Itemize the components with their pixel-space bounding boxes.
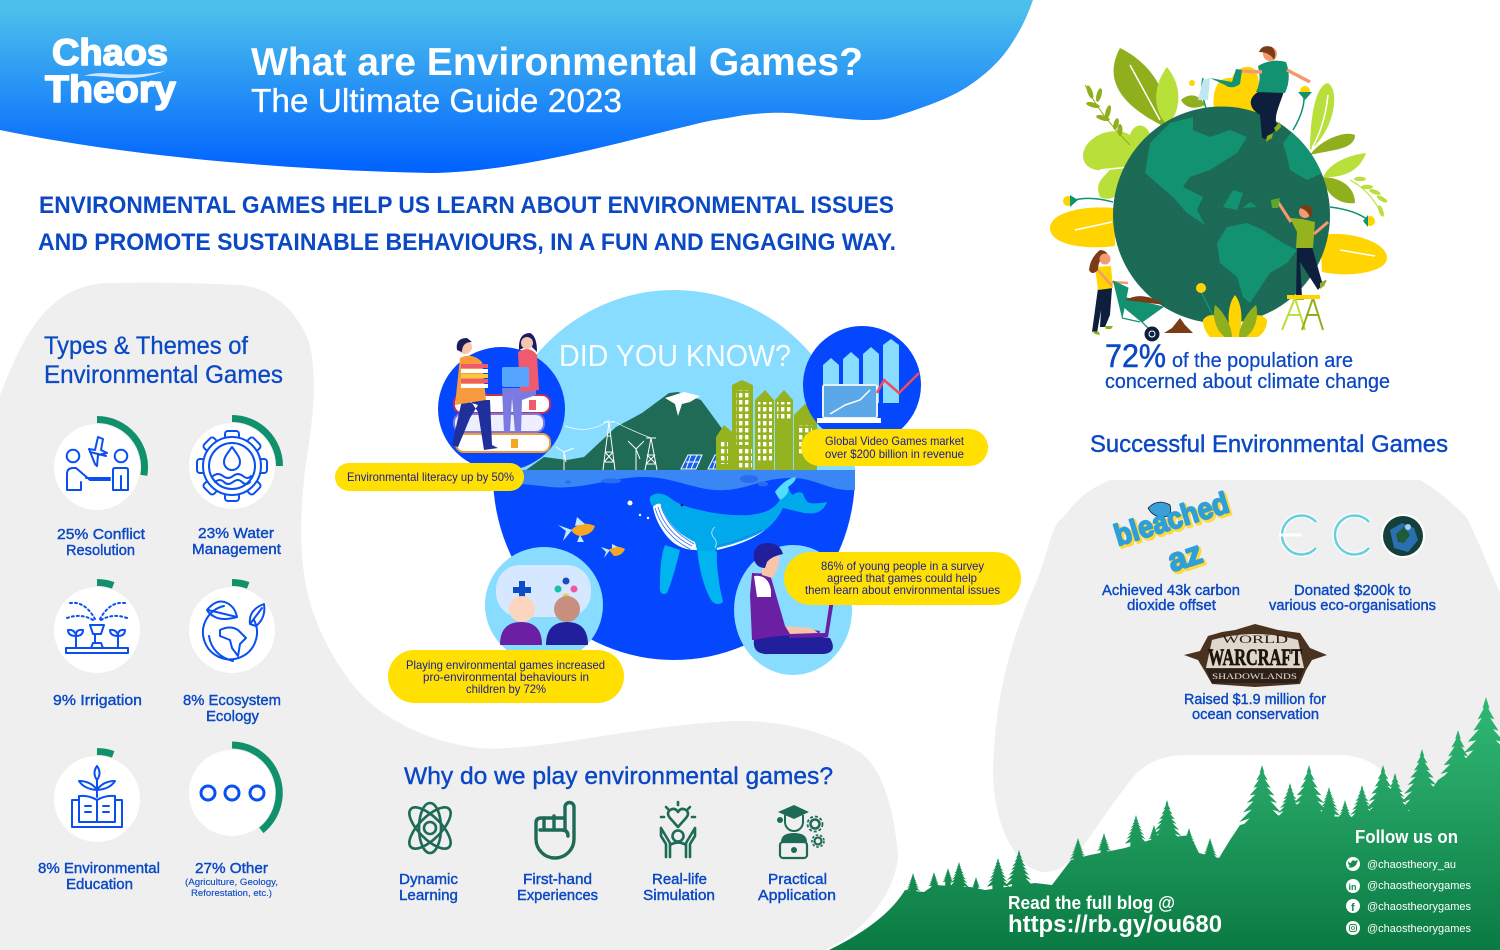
pylons and wind turbines <box>556 420 657 470</box>
ladder <box>1282 297 1323 330</box>
follow us <box>1346 827 1471 935</box>
twitter handle: @chaostheory_au <box>1367 859 1456 871</box>
game: eco: Donated $200k to <box>1294 582 1411 599</box>
icon: book with plant <box>72 766 122 827</box>
game: bleached az: dioxide offset <box>1127 597 1217 614</box>
reason: dynamic learning <box>399 801 458 904</box>
mountain <box>526 392 740 470</box>
whale <box>628 477 827 604</box>
panel: right grey background <box>993 480 1500 872</box>
stat: environmental education 8%: 8% Environmental <box>38 860 160 877</box>
globe sphere and continents <box>1113 106 1330 324</box>
reason: real-life simulation <box>643 802 715 904</box>
heading: types and themes: Types & Themes of <box>44 332 248 360</box>
read the blog: https://rb.gy/ou680 <box>1008 911 1222 938</box>
person with laptop <box>502 333 539 432</box>
stat: other 27%: Reforestation, etc.) <box>191 888 272 898</box>
surface blobs <box>565 475 768 486</box>
facebook handle: @chaostheorygames <box>1367 901 1471 913</box>
reason: real-life simulation: Real-life <box>652 871 707 888</box>
person with books <box>452 338 498 450</box>
game: bleached az <box>1102 487 1240 614</box>
follow us: Follow us on <box>1355 827 1458 847</box>
reason: dynamic learning: Dynamic <box>399 871 458 888</box>
callout: literacy <box>335 463 524 491</box>
icon: pointing hand <box>536 802 574 858</box>
stat: conflict resolution 25% <box>54 420 146 559</box>
circle: market chart <box>803 326 921 444</box>
did you know heading: DID YOU KNOW? <box>559 338 791 373</box>
icon: earth with leaves <box>203 602 264 661</box>
logo: world of warcraft shadowlands <box>1184 624 1327 687</box>
globe illustration <box>1050 46 1388 341</box>
logo: bleached az <box>1110 487 1235 581</box>
callout: literacy: Environmental literacy up by 50% <box>347 470 514 484</box>
logo: Chaos Theory <box>45 32 176 111</box>
icon: atom <box>403 801 457 855</box>
sprigs <box>1085 85 1388 217</box>
callout: young people: 86% of young people in a survey <box>821 559 984 573</box>
logo: world of warcraft shadowlands: WARCRAFT <box>1208 645 1302 670</box>
game: world of warcraft: ocean conservation <box>1192 706 1319 723</box>
stat: irrigation 9% <box>53 582 142 709</box>
logo: world of warcraft shadowlands: SHADOWLANDS <box>1212 672 1297 681</box>
callout: behaviours <box>388 650 624 703</box>
callout: market: over $200 billion in revenue <box>825 447 964 461</box>
facebook handle <box>1346 899 1471 914</box>
stat: ecosystem ecology 8% <box>183 582 281 725</box>
bottom plant <box>1203 295 1267 337</box>
game: eco: various eco-organisations <box>1269 597 1436 614</box>
leaves behind globe <box>1050 48 1387 274</box>
reason: practical application <box>758 805 836 904</box>
logo: Chaos Theory: Chaos <box>52 32 168 73</box>
callout: young people: agreed that games could help <box>827 571 977 585</box>
intro statement: ENVIRONMENTAL GAMES HELP US LEARN ABOUT ENVIRONMENTAL ISSUES <box>39 192 894 219</box>
circle: students on books <box>438 333 565 471</box>
stat: irrigation 9%: 9% Irrigation <box>53 692 142 709</box>
stat: other 27%: (Agriculture, Geology, <box>185 877 278 887</box>
stat: ecosystem ecology 8%: 8% Ecosystem <box>183 692 281 709</box>
stat: climate concern: 72% <box>1105 338 1166 374</box>
game: eco <box>1269 514 1436 614</box>
stat: water management 23% <box>189 418 282 558</box>
title: What are Environmental Games? <box>251 41 863 84</box>
read the blog: Read the full blog @ <box>1008 892 1175 913</box>
stat: environmental education 8%: Education <box>66 876 133 893</box>
icon: person with heart <box>661 802 695 857</box>
logo: eco <box>1279 514 1425 558</box>
icon: handshake with lightning <box>67 437 128 490</box>
stat: climate concern <box>1105 338 1390 393</box>
intro statement: AND PROMOTE SUSTAINABLE BEHAVIOURS, IN A FUN AND ENGAGING WAY. <box>38 229 896 256</box>
linkedin handle: in <box>1348 882 1356 892</box>
person cleaning globe <box>1271 198 1328 300</box>
stat: ecosystem ecology 8%: Ecology <box>206 708 259 725</box>
icon: gear with water drop <box>197 431 267 501</box>
callout: market <box>801 429 988 466</box>
laptop with graph <box>817 385 881 423</box>
heading: successful games: Successful Environmental Games <box>1090 431 1448 458</box>
heading: types and themes: Environmental Games <box>44 361 283 389</box>
flowers <box>1063 78 1375 318</box>
header banner <box>0 0 1033 173</box>
reason: first-hand experiences: First-hand <box>523 871 592 888</box>
did you know illustration <box>438 290 921 675</box>
reason: practical application: Practical <box>768 871 827 888</box>
callout: behaviours: pro-environmental behaviours in <box>423 670 589 684</box>
stat: conflict resolution 25%: 25% Conflict <box>57 526 146 543</box>
stacked books <box>454 395 550 452</box>
reason: first-hand experiences <box>517 802 598 904</box>
stat: conflict resolution 25%: Resolution <box>66 542 135 559</box>
person with wheelbarrow <box>1089 250 1193 342</box>
city buildings <box>716 380 817 470</box>
heading: why do we play: Why do we play environmental games? <box>404 763 833 790</box>
callout: behaviours: Playing environmental games increased <box>406 658 605 672</box>
icon: sprinkler <box>66 603 128 653</box>
stat: climate concern: of the population are <box>1172 350 1353 372</box>
callout: young people <box>784 552 1021 605</box>
logo: bleached az: az <box>1165 536 1208 581</box>
logo: Chaos Theory: Theory <box>45 69 176 111</box>
callout: behaviours: children by 72% <box>466 682 546 696</box>
reason: practical application: Application <box>758 887 836 904</box>
solar panels <box>681 455 729 469</box>
forest footer <box>820 690 1500 950</box>
stat: water management 23%: 23% Water <box>198 525 274 542</box>
stat: environmental education 8% <box>38 752 160 893</box>
circle: person at laptop <box>734 543 852 675</box>
logo: bleached az: az <box>1163 534 1206 579</box>
reason: first-hand experiences: Experiences <box>517 887 598 904</box>
stat: other 27% <box>185 745 279 898</box>
reason: real-life simulation: Simulation <box>643 887 715 904</box>
fish <box>558 517 625 558</box>
stat: other 27%: 27% Other <box>195 860 268 877</box>
logo: bleached az: bleached <box>1112 489 1235 555</box>
water surface band <box>493 470 855 490</box>
stat: water management 23%: Management <box>192 541 282 558</box>
reason: dynamic learning: Learning <box>399 887 458 904</box>
subtitle: The Ultimate Guide 2023 <box>251 82 622 119</box>
circle: children with game controller <box>485 547 603 663</box>
sky half circle <box>520 290 855 470</box>
game: world of warcraft <box>1184 624 1327 723</box>
linkedin handle: @chaostheorygames <box>1367 880 1471 892</box>
person watering <box>1198 46 1310 142</box>
ocean half circle <box>494 477 854 660</box>
logo: bleached az: bleached <box>1110 487 1233 553</box>
logo: world of warcraft shadowlands: WORLD <box>1222 632 1288 646</box>
game: bleached az: Achieved 43k carbon <box>1102 582 1240 599</box>
game: world of warcraft: Raised $1.9 million for <box>1184 691 1326 708</box>
callout: young people: them learn about environmental issues <box>805 583 1000 597</box>
icon: three dots <box>201 786 264 800</box>
heading: types and themes <box>44 332 283 389</box>
intro statement <box>38 192 896 256</box>
stat: climate concern: concerned about climate change <box>1105 371 1390 393</box>
panel: left grey background with why-play lobe <box>0 283 898 950</box>
read the blog <box>1008 892 1222 938</box>
callout: market: Global Video Games market <box>825 434 965 448</box>
icon: graduate with laptop <box>777 805 824 858</box>
instagram handle: @chaostheorygames <box>1367 923 1471 935</box>
facebook handle: f <box>1351 902 1355 914</box>
